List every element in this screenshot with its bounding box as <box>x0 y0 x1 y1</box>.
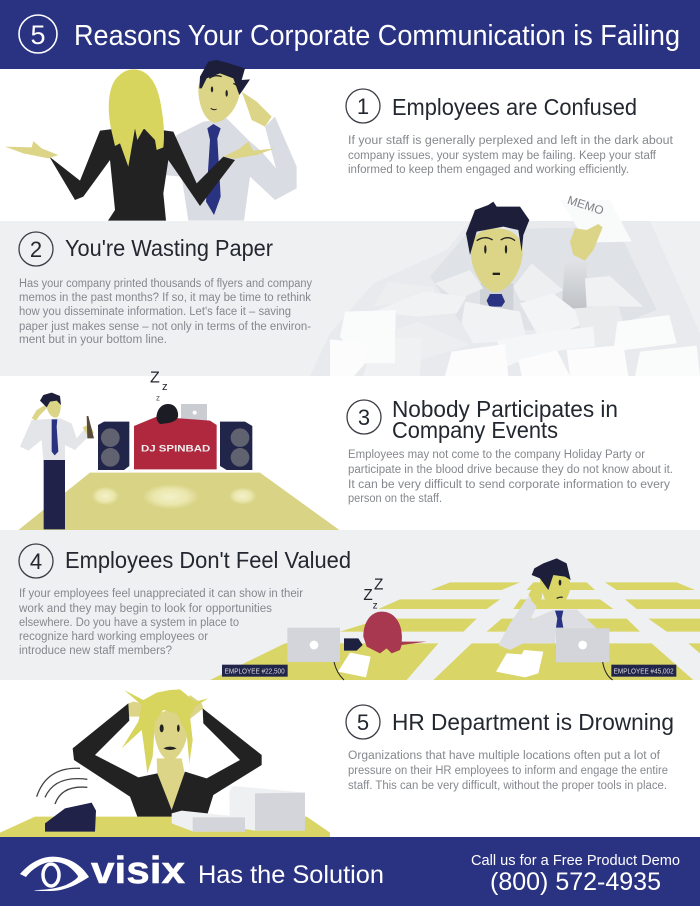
text block 2: paper just makes sense – not only in terms of the environ- <box>19 321 311 333</box>
text block 1 <box>348 135 674 176</box>
text block 2 <box>19 278 312 346</box>
reason 4: 4 <box>30 549 42 574</box>
reason 2 <box>19 232 273 266</box>
text block 2: Has your company printed thousands of flyers and company <box>19 278 312 290</box>
DJ booth: DJ SPINBAD <box>141 444 211 454</box>
text block 3: It can be very difficult to send corporate information to every <box>348 479 670 491</box>
text block 3: Employees may not come to the company Holiday Party or <box>348 449 645 461</box>
text block 5: staff. This can be very difficult, without the proper tools in place. <box>348 780 667 792</box>
label: employee 22,500 <box>222 665 288 677</box>
reason 1 <box>346 89 637 123</box>
illustration: overwhelmed HR employee <box>0 689 330 837</box>
text block 4: elsewhere. Do you have a system in place to <box>19 617 239 629</box>
reason 4 <box>19 544 351 578</box>
call to action: Call us for a Free Product Demo <box>471 852 680 869</box>
reason 3: 3 <box>358 405 370 430</box>
reason 1: 1 <box>357 94 369 119</box>
text block 4: recognize hard working employees or <box>19 631 208 643</box>
text block 1: company issues, your system may be failing. Keep your staff <box>348 150 657 162</box>
laptop <box>181 404 207 421</box>
text block 4: work and they may begin to look for opportunities <box>18 603 272 615</box>
snore letters: Z <box>150 370 160 387</box>
text block 2: memos in the past months? If so, it may be time to rethink <box>19 292 311 304</box>
text block 4: introduce new staff members? <box>19 645 172 657</box>
speaker right <box>220 422 252 470</box>
text block 4 <box>18 588 303 657</box>
slogan: Has the Solution <box>198 861 384 889</box>
reason 2: 2 <box>30 237 42 262</box>
document stacks <box>172 786 305 832</box>
heading 1: Employees are Confused <box>392 94 637 120</box>
snore letters <box>363 576 383 611</box>
snore letters <box>150 370 168 403</box>
text block 5 <box>348 750 668 792</box>
heading 2: You're Wasting Paper <box>65 235 273 261</box>
heading 3: Company Events <box>392 417 558 443</box>
illustration: empty party with DJ <box>18 370 339 530</box>
text block 3: participate in the blood drive because they do not know about it. <box>348 464 673 476</box>
header banner <box>0 0 700 69</box>
snore letters: Z <box>363 587 373 604</box>
heading 4: Employees Don't Feel Valued <box>65 547 351 573</box>
footer banner <box>0 837 700 906</box>
snore letters: z <box>373 600 378 611</box>
heading 5: HR Department is Drowning <box>392 709 674 735</box>
floor tiles <box>210 582 700 680</box>
illustration: buried in paper <box>310 193 700 376</box>
illustration: confused employees <box>5 60 297 221</box>
text block 5: Organizations that have multiple locations often put a lot of <box>348 750 661 762</box>
text block 2: ment but in your bottom line. <box>19 334 167 346</box>
phone number: (800) 572-4935 <box>490 868 661 896</box>
ringing phone <box>37 768 96 832</box>
label: employee 45,002: EMPLOYEE #45,002 <box>614 666 674 675</box>
worried employee <box>498 558 597 650</box>
reason 3 <box>347 396 618 443</box>
snore letters: z <box>156 394 160 403</box>
man with bottle <box>20 393 94 529</box>
reason 5 <box>346 705 674 739</box>
label: employee 45,002 <box>611 665 676 677</box>
text block 3 <box>348 449 673 505</box>
label: employee 22,500: EMPLOYEE #22,500 <box>225 666 285 675</box>
heading 3: Nobody Participates in <box>392 396 618 422</box>
snore letters: Z <box>374 576 383 593</box>
illustration: office floor with two employees <box>210 558 700 680</box>
icon: visix eye logo <box>20 857 89 891</box>
text block 5: pressure on their HR employees to inform and engage the entire <box>348 765 668 777</box>
snore letters: z <box>162 381 168 393</box>
memo label: MEMO <box>566 193 606 218</box>
speaker left <box>98 422 129 470</box>
text block 4: If your employees feel unappreciated it can show in their <box>19 588 303 600</box>
text block 1: informed to keep them engaged and working efficiently. <box>348 164 629 176</box>
text block 3: person on the staff. <box>348 493 442 505</box>
DJ booth <box>134 417 217 469</box>
reason 5: 5 <box>357 710 369 735</box>
text block 2: how you disseminate information. Let's face it – saving <box>19 306 291 318</box>
text block 1: If your staff is generally perplexed and left in the dark about <box>348 135 674 147</box>
header banner: 5 <box>30 20 46 50</box>
logo wordmark: visix <box>91 850 185 892</box>
